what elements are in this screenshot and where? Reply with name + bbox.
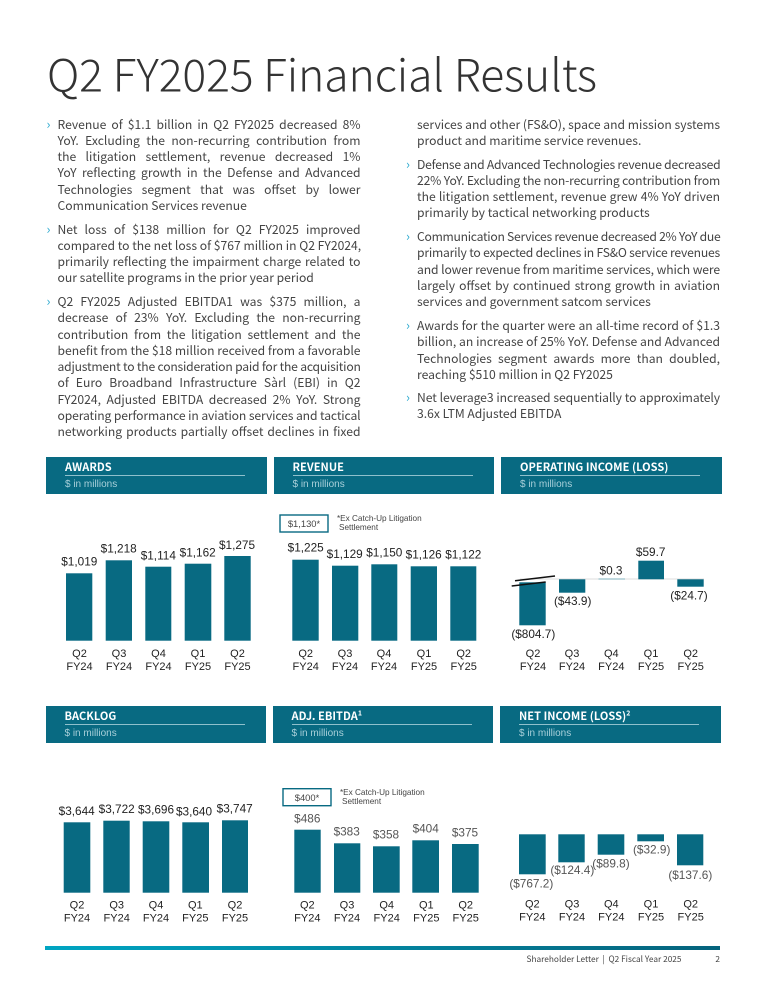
bullet: adjusted EBITDA: benefit from the $18 million received from a favorable: [58, 342, 360, 359]
bar chart: backlog: FY24: [64, 912, 90, 924]
bar chart: backlog: $3,696: [138, 802, 174, 816]
bullet: net leverage: [406, 387, 720, 422]
bar chart: backlog: Q3: [109, 899, 124, 911]
bullet: adjusted EBITDA: of Euro Broadband Infrastructure Sàrl (EBI) in Q2: [58, 374, 360, 391]
bar chart: net income: FY25: [678, 912, 704, 924]
bullet: adjusted EBITDA: contribution from the litigation settlement and the: [58, 326, 360, 342]
bar chart: adj. EBITDA: FY25: [413, 912, 439, 924]
bar chart: operating income: ($804.7): [511, 627, 555, 641]
bar chart: adj. EBITDA: FY24: [334, 912, 360, 924]
text: ›: [406, 226, 410, 245]
bullet: communication services: primarily to expected declines in FS&O service revenues: [417, 244, 720, 261]
callout: adj. EBITDA ex catch-up: *Ex Catch-Up Litigation: [340, 788, 425, 797]
bullet: revenue: [46, 114, 360, 214]
bar chart: awards: FY25: [185, 661, 211, 673]
bar chart: adj. EBITDA: FY25: [453, 912, 479, 924]
bar chart: adj. EBITDA: $383: [334, 825, 360, 839]
bar chart: backlog: $3,640: [176, 804, 212, 818]
callout: revenue ex catch-up: $1,130*: [288, 518, 321, 529]
bar chart: net income: Q3: [565, 899, 579, 911]
callout: adj. EBITDA ex catch-up: $400*: [295, 792, 320, 803]
bar chart: backlog: FY25: [222, 912, 248, 924]
panel header: net income: [500, 706, 720, 743]
bar chart: backlog: FY24: [104, 912, 130, 924]
bullet: revenue: Communication Services revenue: [58, 197, 247, 214]
footer text: Shareholder Letter | Q2 Fiscal Year 2025: [526, 953, 682, 965]
bar chart: awards: FY24: [106, 661, 132, 673]
bar chart: operating income: FY24: [559, 661, 585, 673]
bullet: communication services: services and government satcom services: [417, 293, 651, 310]
panel header: adj. EBITDA: [272, 706, 493, 743]
bar chart: adj. EBITDA: Q3: [340, 899, 354, 911]
footer gradient bar: [45, 946, 720, 950]
bar chart: adj. EBITDA: FY24: [374, 912, 400, 924]
bar chart: net income: FY24: [559, 912, 585, 924]
bar chart: backlog: [59, 801, 253, 924]
bar chart: adj. EBITDA: Q4: [379, 899, 394, 911]
bar chart: adj. EBITDA: FY24: [294, 912, 320, 924]
bullet: adjusted EBITDA: Q2 FY2025 Adjusted EBITDA1 was $375 million, a: [58, 293, 360, 310]
bar chart: backlog: $3,747: [217, 801, 253, 815]
panel header: backlog: [46, 706, 266, 743]
axis break marks: [512, 576, 555, 586]
title: Q2 FY2025 Financial Results: [47, 40, 597, 104]
panel header: backlog: BACKLOG: [64, 708, 116, 724]
bar chart: adj. EBITDA: Q1: [419, 899, 434, 911]
bar chart: backlog: $3,644: [59, 804, 95, 818]
bar chart: adj. EBITDA: [294, 812, 479, 924]
bullet: communication services: Communication Services revenue decreased 2% YoY due: [417, 228, 720, 245]
bar chart: revenue: Q3: [338, 648, 352, 660]
bar chart: awards: FY24: [66, 661, 93, 673]
bar chart: operating income: FY25: [638, 661, 664, 673]
bar chart: awards: $1,019: [61, 555, 97, 569]
bar chart: adj. EBITDA: $358: [373, 828, 400, 842]
panel header: awards: [46, 457, 266, 494]
bar chart: backlog: FY24: [143, 912, 169, 924]
bar chart: revenue: $1,150: [366, 546, 403, 560]
bar chart: awards: [61, 538, 255, 673]
panel header: adj. EBITDA: ADJ. EBITDA1: [292, 708, 362, 724]
bullet: awards: billion, an increase of 25% YoY. Defense and Advanced: [417, 333, 720, 350]
bullet: revenue: Revenue of $1.1 billion in Q2 FY2025 decreased 8%: [58, 116, 360, 132]
text: ›: [46, 218, 50, 238]
bullet continuation: services: [417, 116, 720, 149]
bullet: revenue: Technologies segment that was offset by lower: [58, 180, 360, 198]
bar chart: net income: ($137.6): [668, 868, 712, 882]
bar chart: awards: $1,218: [101, 541, 137, 555]
bar chart: adj. EBITDA: $486: [294, 812, 321, 826]
bar chart: net income: ($89.8): [592, 856, 630, 870]
bullet: adjusted EBITDA: [46, 291, 361, 440]
bullet: awards: Awards for the quarter were an all-time record of $1.3: [417, 317, 720, 334]
bullet: awards: [406, 315, 720, 383]
panel header: revenue: $ in millions: [292, 478, 345, 490]
bar chart: net income: FY24: [598, 912, 624, 924]
bar chart: revenue: FY25: [451, 661, 477, 673]
callout: revenue ex catch-up: [280, 514, 422, 532]
panel header: revenue: [274, 457, 494, 494]
bar chart: backlog: Q1: [188, 899, 203, 911]
text: ›: [46, 114, 50, 132]
bar chart: awards: Q1: [191, 648, 205, 660]
bullet: net leverage: Net leverage3 increased sequentially to approximately: [417, 389, 720, 406]
bar chart: awards: $1,275: [219, 538, 255, 552]
panel header: awards: $ in millions: [65, 478, 117, 490]
bar chart: adj. EBITDA: $375: [452, 825, 479, 839]
bar chart: net income: ($124.4): [550, 863, 594, 877]
bar chart: revenue: FY25: [411, 661, 437, 673]
bar chart: operating income: Q2: [526, 648, 540, 660]
bullet: communication services: [406, 226, 720, 310]
bullet continuation: services: product and maritime service revenues.: [417, 132, 641, 149]
bar chart: net income: ($32.9): [633, 843, 670, 857]
bar chart: backlog: $3,722: [99, 802, 135, 816]
bullet: net loss: Net loss of $138 million for Q2 FY2025 improved: [58, 220, 360, 238]
bullet: net loss: compared to the net loss of $767 million in Q2 FY2024,: [58, 237, 361, 254]
bullet: revenue: the litigation settlement, revenue decreased 1%: [58, 148, 360, 165]
bar chart: revenue: [288, 541, 481, 673]
bar chart: adj. EBITDA: $404: [413, 822, 439, 836]
panel header: net income: NET INCOME (LOSS)2: [519, 708, 630, 724]
panel header: adj. EBITDA: $ in millions: [292, 728, 344, 738]
bullet: adjusted EBITDA: networking products partially offset declines in fixed: [58, 423, 360, 440]
bullet: adjusted EBITDA: operating performance in aviation services and tactical: [58, 407, 360, 424]
bar chart: operating income: FY24: [598, 661, 624, 673]
bullet: communication services: largely offset by continued strong growth in aviation: [417, 277, 720, 294]
bullet: revenue: YoY. Excluding the non-recurring contribution from: [58, 132, 360, 149]
bar chart: revenue: FY24: [371, 661, 397, 673]
panel header: awards: AWARDS: [65, 459, 112, 475]
bar chart: adj. EBITDA: Q2: [300, 899, 315, 911]
bullet: defense and advanced technologies: 22% YoY. Excluding the non-recurring contribution from: [417, 172, 720, 189]
bar chart: revenue: Q2: [298, 648, 313, 660]
text: ›: [406, 315, 410, 334]
bullet: awards: reaching $510 million in Q2 FY2025: [417, 366, 613, 383]
bar chart: awards: Q2: [72, 648, 87, 660]
bullet: communication services: and lower revenue from maritime services, which were: [417, 260, 720, 278]
page number: 2: [715, 953, 720, 965]
bar chart: awards: Q2: [230, 648, 245, 660]
bar chart: backlog: Q4: [149, 899, 163, 911]
bar chart: backlog: Q2: [70, 899, 84, 911]
bar chart: operating income: Q1: [644, 648, 658, 660]
panel header: operating income: [501, 457, 722, 494]
text: ›: [46, 291, 50, 310]
bar chart: awards: Q3: [112, 648, 126, 660]
text: ›: [406, 387, 410, 406]
panel header: revenue: REVENUE: [292, 459, 344, 475]
callout: revenue ex catch-up: Settlement: [339, 523, 379, 532]
bar chart: revenue: $1,225: [288, 541, 324, 555]
bar chart: operating income: FY25: [678, 661, 704, 673]
bar chart: adj. EBITDA: Q2: [458, 899, 473, 911]
bar chart: revenue: Q1: [417, 648, 431, 660]
bullet: awards: Technologies segment awards more than doubled,: [417, 350, 720, 366]
bar chart: revenue: $1,129: [327, 547, 363, 561]
bar chart: revenue: Q2: [456, 648, 471, 660]
bullet: net loss: [46, 218, 361, 286]
callout: revenue ex catch-up: *Ex Catch-Up Litigation: [337, 514, 422, 523]
bar chart: operating income: $0.3: [600, 564, 623, 578]
bar chart: operating income: $59.7: [636, 545, 665, 559]
bar chart: revenue: $1,126: [406, 547, 442, 561]
bar chart: net income: Q2: [525, 899, 540, 911]
bar chart: awards: FY25: [224, 661, 251, 673]
bullet: defense and advanced technologies: [406, 154, 720, 221]
bar chart: net income: FY25: [638, 912, 664, 924]
bar chart: revenue: FY24: [293, 661, 319, 673]
bar chart: operating income: ($43.9): [554, 594, 591, 608]
panel header: net income: $ in millions: [519, 728, 571, 738]
callout: adj. EBITDA ex catch-up: [283, 788, 425, 806]
bar chart: net income: Q2: [683, 899, 698, 911]
bullet: net leverage: 3.6x LTM Adjusted EBITDA: [417, 405, 561, 422]
bullet: defense and advanced technologies: the litigation settlement, revenue grew 4% YoY driven: [417, 188, 720, 205]
bar chart: awards: Q4: [151, 648, 166, 660]
bullet: adjusted EBITDA: FY2024, Adjusted EBITDA decreased 2% YoY. Strong: [58, 390, 360, 408]
bar chart: revenue: $1,122: [445, 548, 481, 562]
callout: adj. EBITDA ex catch-up: Settlement: [342, 797, 382, 806]
bar chart: operating income: Q2: [683, 648, 698, 660]
bar chart: net income: Q4: [604, 899, 619, 911]
bar chart: operating income: [511, 545, 708, 673]
bar chart: net income: ($767.2): [509, 876, 553, 890]
bar chart: operating income: Q4: [604, 648, 619, 660]
bullet: adjusted EBITDA: decrease of 23% YoY. Excluding the non-recurring: [58, 309, 360, 326]
bullet continuation: services: services and other (FS&O), space and mission systems: [417, 116, 720, 132]
bullet: defense and advanced technologies: Defense and Advanced Technologies revenue decreased: [417, 156, 720, 172]
bar chart: awards: $1,114: [141, 548, 176, 562]
panel header: backlog: $ in millions: [64, 728, 117, 738]
bar chart: operating income: Q3: [565, 648, 579, 660]
text: ›: [406, 154, 410, 172]
bullet: net loss: our satellite programs in the prior year period: [58, 269, 314, 286]
bar chart: net income: [509, 834, 712, 924]
bar chart: operating income: FY24: [520, 661, 546, 673]
panel header: operating income: $ in millions: [520, 478, 572, 490]
bar chart: net income: FY24: [519, 912, 545, 924]
bullet: adjusted EBITDA: adjustment to the consideration paid for the acquisition: [58, 358, 361, 375]
bar chart: operating income: ($24.7): [670, 588, 708, 602]
bar chart: awards: FY24: [145, 661, 172, 673]
bullet: defense and advanced technologies: primarily by tactical networking products: [417, 204, 650, 221]
bar chart: revenue: FY24: [332, 661, 358, 673]
bar chart: awards: $1,162: [180, 545, 216, 559]
bar chart: backlog: FY25: [182, 912, 208, 924]
bullet: net loss: primarily reflecting the impairment charge related to: [58, 253, 360, 270]
bullet: revenue: YoY reflecting growth in the Defense and Advanced: [58, 164, 360, 181]
panel header: operating income: OPERATING INCOME (LOSS): [520, 459, 668, 475]
bar chart: net income: Q1: [644, 899, 658, 911]
bar chart: revenue: Q4: [377, 648, 391, 660]
bar chart: backlog: Q2: [228, 899, 242, 911]
